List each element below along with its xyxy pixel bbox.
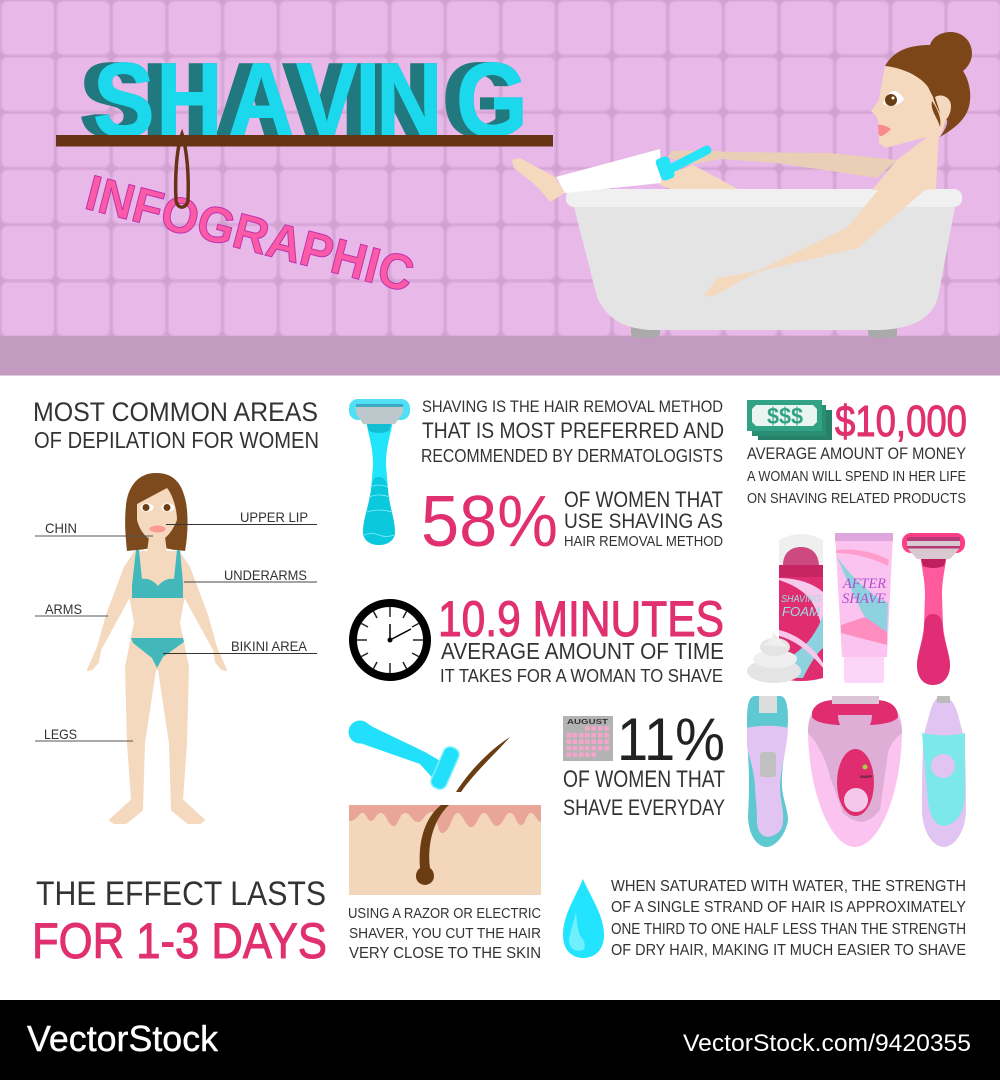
icon: shaving foam can [779, 534, 823, 681]
icon: water drop [563, 879, 604, 958]
stat: 11 percent: OF WOMEN THAT [563, 766, 725, 793]
face [871, 66, 948, 148]
tub feet [631, 326, 897, 338]
stat: 10,000 dollars [747, 397, 967, 507]
bikini bottom [131, 638, 184, 668]
label: bikini area: BIKINI AREA [231, 638, 308, 654]
label: chin [35, 520, 153, 536]
eyes [140, 504, 174, 512]
icon: shaving foam swirl [747, 632, 801, 683]
text block: shaving preferred: SHAVING IS THE HAIR REMOVAL METHOD [422, 398, 723, 416]
label: underarms [184, 567, 317, 583]
hair [125, 473, 188, 551]
ear [935, 95, 951, 122]
icon: pink razor [902, 533, 965, 685]
hair root [416, 805, 449, 885]
text block: effect lasts: FOR 1-3 DAYS [32, 913, 327, 969]
stat: 58 percent: 58% [421, 482, 558, 562]
text block: water strength [611, 878, 966, 959]
label: upper lip: UPPER LIP [240, 509, 308, 525]
icon: calendar: AUGUST [567, 719, 609, 726]
face [137, 488, 177, 541]
icon: epilator centre: ON/OFF [860, 774, 872, 779]
torso and reclined arm [704, 110, 939, 297]
icon: calendar [563, 716, 613, 761]
labels: body areas [35, 509, 317, 742]
cut hair tip [456, 737, 510, 792]
icon: hanging loop [176, 134, 188, 207]
lips [150, 526, 166, 532]
tub rim back section [566, 189, 962, 207]
stat: 10.9 minutes: AVERAGE AMOUNT OF TIME [441, 638, 724, 664]
subtitle: INFOGRAPHIC: INFOGRAPHIC [80, 164, 420, 303]
icon: shaving foam can: SHAVING [781, 593, 821, 605]
icon: trimmer left [747, 696, 788, 847]
illustration: woman body diagram [88, 473, 226, 823]
caption: razor cutting: VERY CLOSE TO THE SKIN [349, 945, 541, 962]
footer: image reference: VectorStock.com/9420355 [683, 1030, 971, 1057]
caption: razor cutting [348, 906, 541, 962]
skin [349, 805, 541, 895]
icon: epilator centre [808, 696, 902, 847]
illustration: razor cutting hair [348, 720, 541, 895]
raised thigh [660, 165, 740, 190]
tiled wall [0, 0, 1000, 337]
tub body [574, 207, 955, 330]
heading: most common areas [33, 397, 319, 453]
stat: 11 percent [563, 706, 725, 820]
icon: after shave tube [835, 533, 893, 683]
stat: 10,000 dollars: $10,000 [835, 397, 967, 446]
label: arms [35, 601, 108, 617]
panel: bathroom scene [0, 0, 1000, 376]
footer: VectorStock logo: VectorStock [27, 1018, 219, 1059]
lips [878, 125, 891, 136]
stat: 58 percent [421, 482, 723, 562]
stat: 10,000 dollars: AVERAGE AMOUNT OF MONEY [747, 445, 966, 463]
text block: water strength: OF A SINGLE STRAND OF HAIR IS APPROXIMATELY [611, 899, 966, 916]
caption: razor cutting: SHAVER, YOU CUT THE HAIR [349, 925, 541, 942]
eye [883, 91, 904, 106]
text block: shaving preferred: RECOMMENDED BY DERMATOLOGISTS [421, 446, 723, 466]
icon: after shave tube: SHAVE [842, 591, 886, 607]
text block: shaving preferred [421, 398, 724, 466]
heading: most common areas: MOST COMMON AREAS [33, 397, 318, 427]
label: chin: CHIN [45, 520, 77, 536]
text block: effect lasts: THE EFFECT LASTS [36, 875, 326, 913]
stat: 58 percent: OF WOMEN THAT [564, 487, 723, 512]
icon: cyan razor [349, 399, 410, 545]
stat: 10,000 dollars: A WOMAN WILL SPEND IN HER LIFE [747, 468, 966, 485]
body [88, 537, 226, 823]
hair strand [932, 101, 940, 127]
heading: most common areas: OF DEPILATION FOR WOMEN [34, 427, 319, 453]
label: legs: LEGS [44, 726, 77, 742]
stat: 58 percent: USE SHAVING AS [564, 510, 723, 533]
outstretched arm [668, 150, 897, 178]
stat: 11 percent: SHAVE EVERYDAY [563, 795, 725, 820]
caption: razor cutting: USING A RAZOR OR ELECTRIC [348, 906, 541, 922]
text block: effect lasts [32, 875, 327, 969]
icon: trimmer right [922, 696, 966, 847]
bra [132, 550, 183, 598]
icon: after shave tube: AFTER [842, 576, 886, 592]
razor [348, 720, 461, 791]
title: SHAVING: SHAVING [93, 40, 528, 158]
label: legs [35, 726, 133, 742]
illustration: woman shaving in bathtub [512, 32, 972, 338]
stat: 11 percent: 11% [617, 706, 725, 773]
label: arms: ARMS [45, 601, 82, 617]
text block: shaving preferred: THAT IS MOST PREFERRED AND [422, 418, 724, 443]
footer bar [0, 1000, 1000, 1080]
epidermis layer [349, 805, 541, 833]
icon: clock [353, 603, 427, 677]
shelf [56, 135, 553, 146]
text block: water strength: WHEN SATURATED WITH WATER, THE STRENGTH [611, 878, 966, 895]
razor [655, 150, 707, 182]
text block: water strength: OF DRY HAIR, MAKING IT MUCH EASIER TO SHAVE [611, 942, 966, 959]
floor [0, 336, 1000, 376]
foot [512, 158, 565, 202]
icon: shaving foam can: FOAM [782, 604, 820, 619]
stat: 58 percent: HAIR REMOVAL METHOD [564, 533, 723, 550]
stat: 10.9 minutes [438, 591, 724, 686]
stat: 10.9 minutes: IT TAKES FOR A WOMAN TO SHAVE [440, 666, 723, 686]
stat: 10.9 minutes: 10.9 MINUTES [438, 591, 724, 647]
hair and bun [885, 32, 972, 137]
label: underarms: UNDERARMS [224, 567, 307, 583]
white shaving cream on leg [556, 149, 661, 193]
icon: money: $$$ [767, 403, 803, 429]
stat: 10,000 dollars: ON SHAVING RELATED PRODUCTS [747, 490, 966, 507]
icon: money [747, 400, 832, 440]
